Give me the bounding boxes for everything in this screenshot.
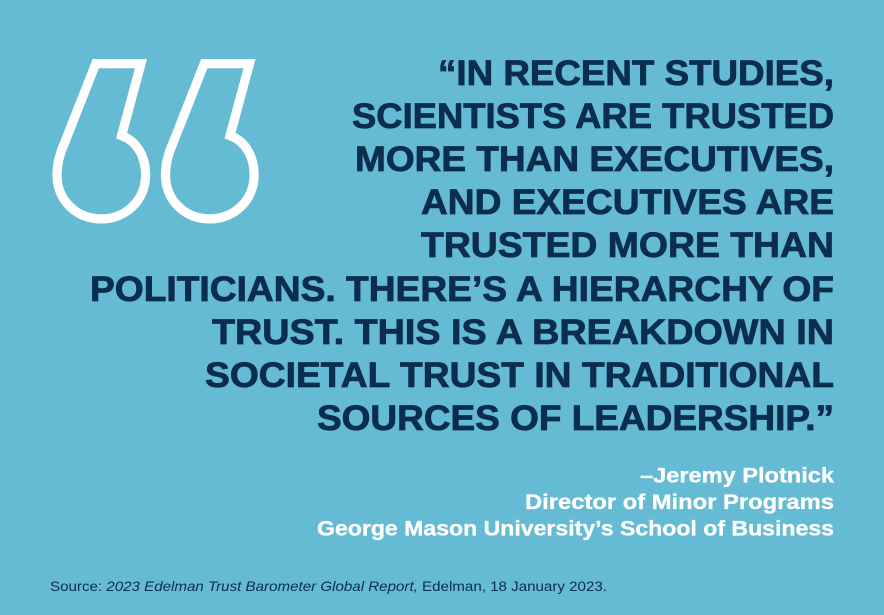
quote text: MORE THAN EXECUTIVES, (355, 139, 834, 179)
quote text: SOURCES OF LEADERSHIP.” (317, 398, 834, 438)
attribution: –Jeremy Plotnick (640, 464, 834, 488)
quote text: TRUSTED MORE THAN (421, 225, 834, 265)
attribution: Director of Minor Programs (525, 491, 834, 514)
source note: Source: 2023 Edelman Trust Barometer Global Report, Edelman, 18 January 2023. (50, 578, 607, 594)
quote text: SOCIETAL TRUST IN TRADITIONAL (205, 355, 834, 395)
quote text (90, 53, 834, 438)
attribution (317, 464, 834, 540)
quote text: AND EXECUTIVES ARE (421, 182, 834, 222)
icon: outlined quotation marks (57, 64, 254, 219)
quote text: SCIENTISTS ARE TRUSTED (352, 96, 834, 136)
quote text: TRUST. THIS IS A BREAKDOWN IN (212, 312, 834, 352)
quote text: “IN RECENT STUDIES, (438, 53, 834, 93)
quote text: POLITICIANS. THERE’S A HIERARCHY OF (90, 269, 834, 309)
attribution: George Mason University’s School of Business (317, 518, 834, 540)
